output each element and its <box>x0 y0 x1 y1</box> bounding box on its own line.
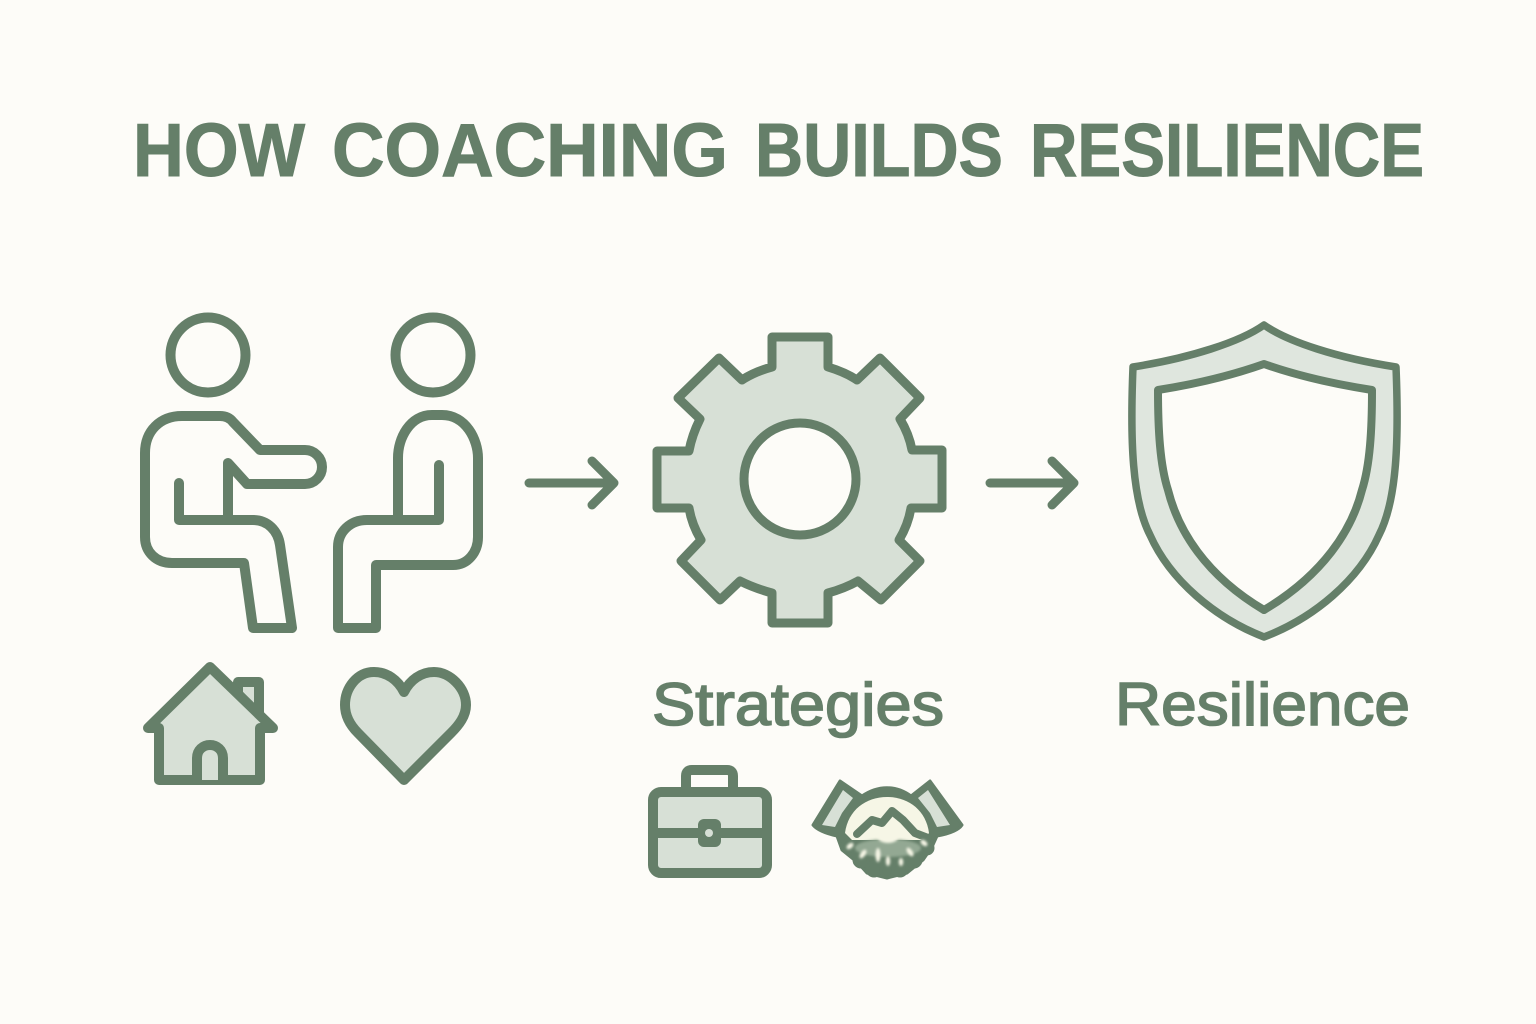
icon: handshake <box>813 781 962 878</box>
title: HOW <box>133 108 305 192</box>
icon: heart <box>345 672 466 780</box>
handshake silhouette <box>813 781 962 878</box>
arrow: coaching to strategies <box>529 461 614 505</box>
right cuff <box>918 790 950 827</box>
title: COACHING <box>332 108 728 192</box>
clasped hands <box>845 797 929 840</box>
icon: gear <box>657 337 942 623</box>
title: BUILDS <box>755 108 1003 192</box>
icon: coach and client seated <box>145 318 478 628</box>
briefcase clasp <box>698 819 721 847</box>
icon: shield <box>1132 325 1397 637</box>
icon: briefcase <box>653 770 767 873</box>
shield outer band <box>1132 325 1397 637</box>
label: strategies: Strategies <box>652 671 944 738</box>
gear hole <box>744 423 856 535</box>
title: RESILIENCE <box>1030 108 1424 192</box>
shield inner panel <box>1158 364 1372 610</box>
label: resilience: Resilience <box>1115 671 1410 738</box>
arrow: strategies to resilience <box>990 461 1074 505</box>
person: client <box>338 318 478 628</box>
person: coach <box>145 318 322 628</box>
left cuff <box>822 790 853 827</box>
icon: house <box>148 667 273 780</box>
